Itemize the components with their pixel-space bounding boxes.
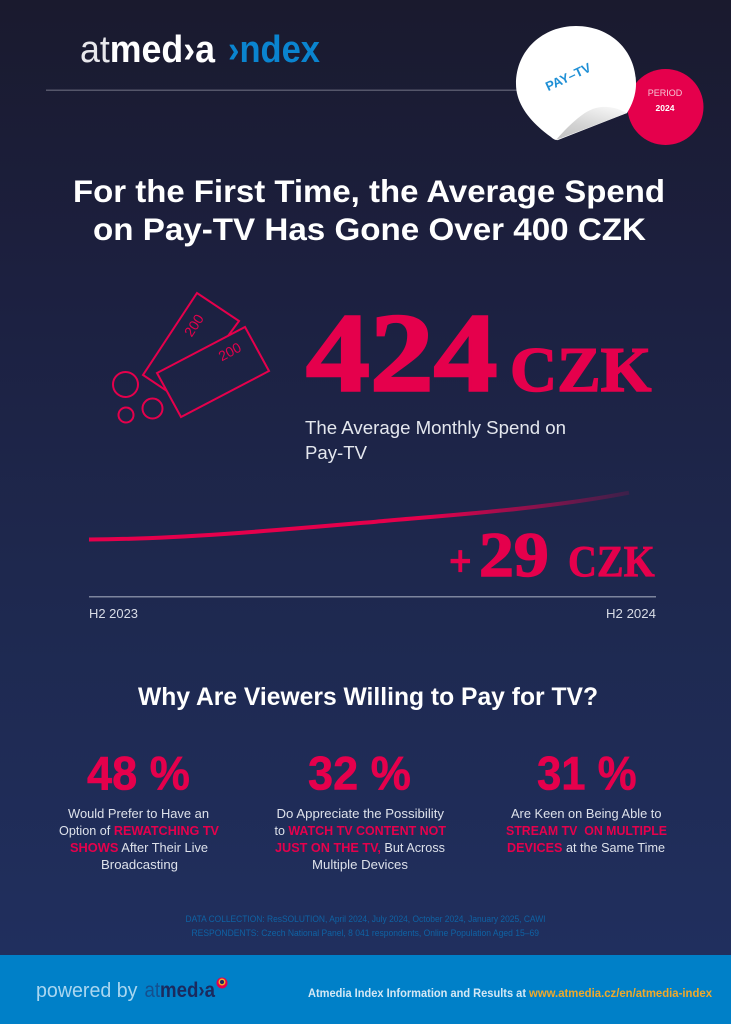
stat column: 32 percent: Do Appreciate the Possibility <box>276 806 444 821</box>
stat column: 32 percent: to WATCH TV CONTENT NOT <box>274 823 446 838</box>
stat column: 32 percent <box>274 747 446 872</box>
stat column: 31 percent <box>506 747 667 855</box>
stat column: 31 percent: STREAM TV ON MULTIPLE <box>506 823 667 838</box>
stat column: 48 percent: 48 % <box>87 747 190 800</box>
change figure: +29 CZK: CZK <box>568 538 655 586</box>
section heading: Why Are Viewers Willing to Pay for TV? <box>138 683 598 711</box>
stat column: 48 percent: Broadcasting <box>101 857 178 872</box>
stat column: 31 percent: Are Keen on Being Able to <box>511 806 662 821</box>
change figure: +29 CZK <box>449 520 655 590</box>
pay-tv sticker: PAY–TV <box>543 60 594 94</box>
stat column: 32 percent: 32 % <box>308 747 411 800</box>
pay-tv sticker <box>516 26 636 140</box>
change figure: +29 CZK: 29 <box>479 520 549 590</box>
stat column: 32 percent: Multiple Devices <box>312 857 408 872</box>
axis labels: H2 2024 <box>606 606 656 621</box>
icon: banknotes and coins: 200 <box>181 311 207 339</box>
icon: atmedia mark <box>216 978 228 988</box>
main figure: 424 CZK: 424 <box>306 291 497 415</box>
header divider <box>46 90 518 91</box>
powered by atmedia logo: atmed›a <box>144 979 215 1002</box>
stat column: 31 percent: DEVICES at the Same Time <box>507 840 665 855</box>
stat column: 48 percent: SHOWS After Their Live <box>70 840 208 855</box>
period badge <box>628 69 704 145</box>
footer link text: Atmedia Index Information and Results at <box>308 988 526 1000</box>
icon: banknotes and coins <box>113 293 269 422</box>
logo: atmedia index <box>80 29 320 71</box>
footer link text <box>308 988 713 1000</box>
methodology note: RESPONDENTS: Czech National Panel, 8 041 respondents, Online Population Aged 15–69 <box>192 928 539 938</box>
main figure caption: The Average Monthly Spend on <box>305 418 566 438</box>
stat column: 48 percent: Option of REWATCHING TV <box>59 823 219 838</box>
period badge: PERIOD <box>648 88 683 98</box>
main figure caption <box>305 418 566 463</box>
methodology note <box>186 914 546 938</box>
title: For the First Time, the Average Spend <box>73 173 665 209</box>
chart axis <box>89 596 656 598</box>
logo: atmedia index: atmed›a <box>80 29 216 71</box>
axis labels <box>89 606 656 621</box>
title: on Pay-TV Has Gone Over 400 CZK <box>93 211 646 247</box>
powered by atmedia logo <box>36 978 228 1002</box>
trend chart <box>89 493 656 621</box>
stat column: 32 percent: JUST ON THE TV, But Across <box>275 840 445 855</box>
footer band <box>0 955 731 1024</box>
title <box>73 173 665 247</box>
period badge: 2024 <box>656 103 675 113</box>
stat column: 48 percent: Would Prefer to Have an <box>68 806 209 821</box>
footer link text: www.atmedia.cz/en/atmedia-index <box>528 988 713 1000</box>
trend line <box>89 493 629 540</box>
powered by atmedia logo: powered by <box>36 980 138 1002</box>
main figure: 424 CZK <box>306 291 651 415</box>
axis labels: H2 2023 <box>89 606 138 621</box>
methodology note: DATA COLLECTION: ResSOLUTION, April 2024, July 2024, October 2024, January 2025, CAWI <box>186 914 546 924</box>
main figure: 424 CZK: CZK <box>510 334 651 405</box>
stat column: 31 percent: 31 % <box>537 747 637 800</box>
stat column: 48 percent <box>59 747 219 872</box>
change figure: +29 CZK: + <box>449 538 472 587</box>
main figure caption: Pay-TV <box>305 443 367 463</box>
icon: banknotes and coins: 200 <box>216 339 244 364</box>
logo: atmedia index: ›ndex <box>228 29 320 71</box>
